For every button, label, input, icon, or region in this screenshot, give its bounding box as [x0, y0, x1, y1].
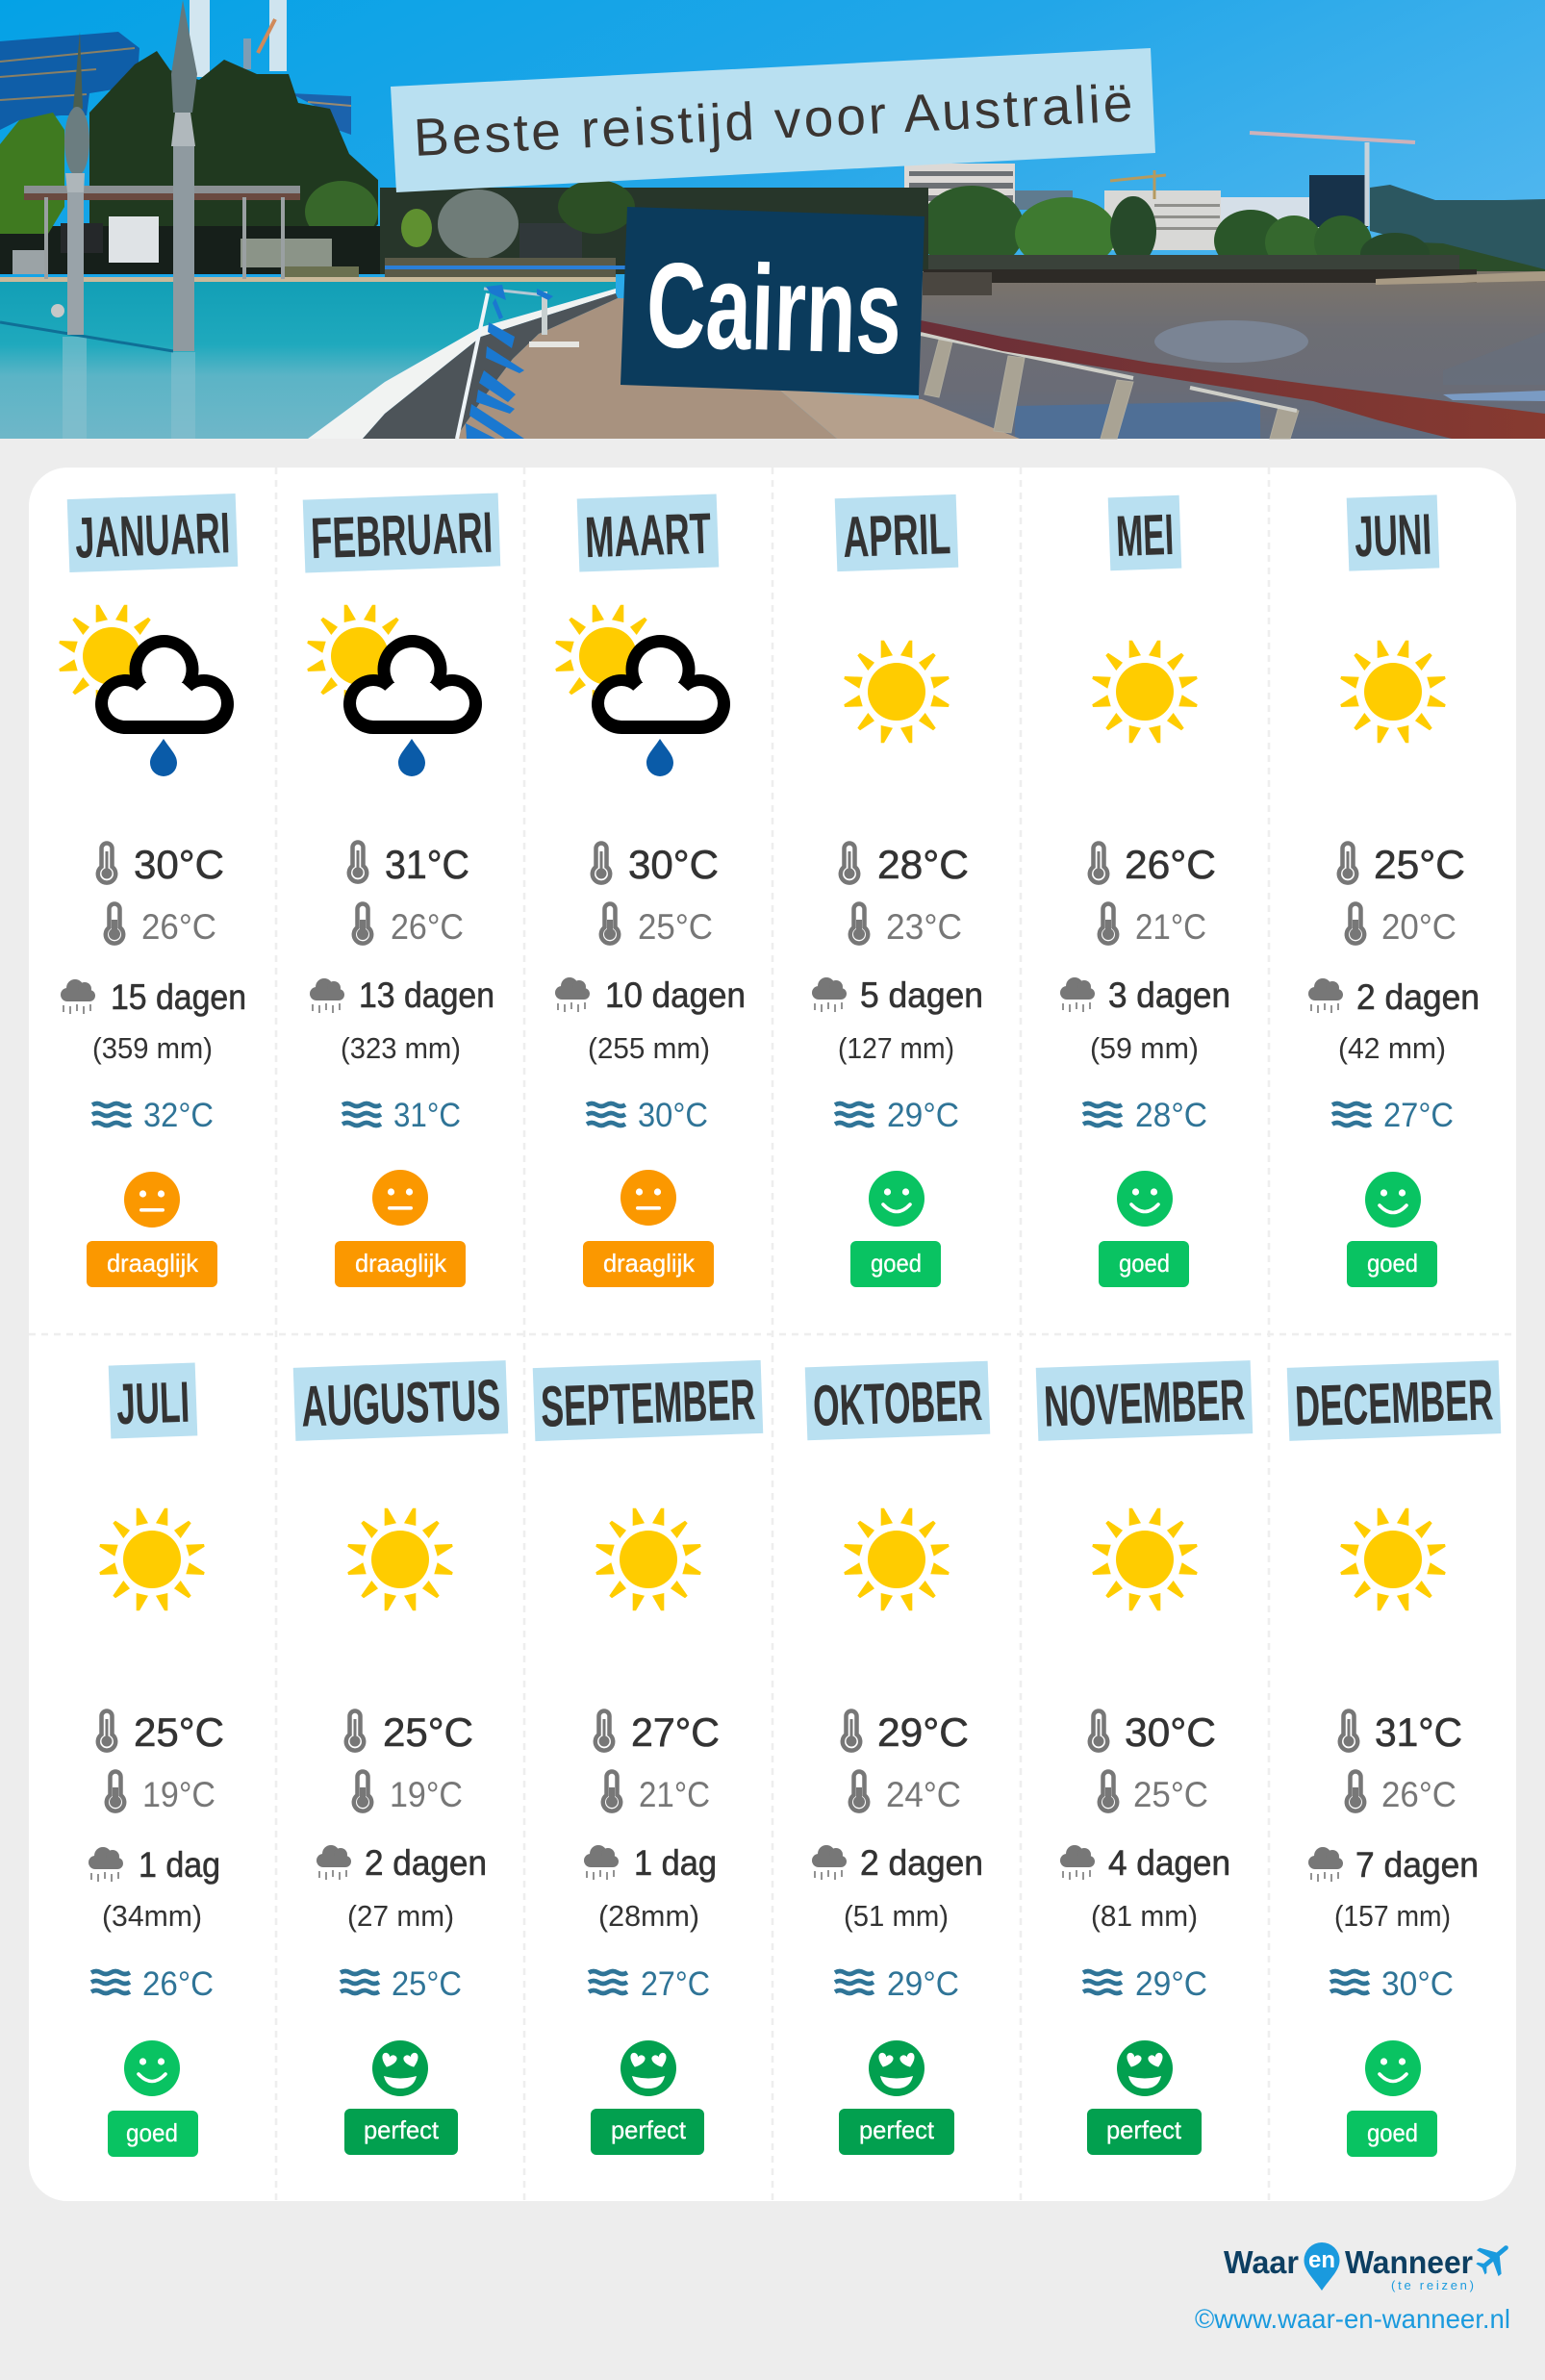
logo: Waar en Wanneer: [1224, 2233, 1519, 2292]
rating face: [372, 2040, 428, 2096]
water temperature: [341, 1965, 462, 2003]
rating badge: [108, 2111, 198, 2157]
water temperature: [91, 1965, 214, 2003]
logo: Waar en Wanneer: Waar: [1224, 2244, 1299, 2280]
rainfall: (51 mm): [844, 1899, 949, 1933]
title banner: [391, 48, 1155, 192]
month label: NOVEMBER: [1043, 1367, 1246, 1439]
water temperature: 28°C: [1135, 1097, 1207, 1134]
rating badge: [1099, 1241, 1189, 1287]
icon: sun: [99, 1508, 205, 1610]
rating badge: perfect: [1106, 2115, 1182, 2144]
rating face: [124, 2040, 180, 2096]
rain days: 3 dagen: [1108, 975, 1230, 1015]
rain days: 2 dagen: [365, 1843, 487, 1883]
month label: FEBRUARI: [310, 500, 494, 570]
month label: APRIL: [842, 501, 951, 570]
month label: SEPTEMBER: [540, 1367, 756, 1439]
rating face: [621, 2040, 676, 2096]
rating face: [1365, 1172, 1421, 1228]
max temperature: [1340, 1709, 1462, 1755]
water temperature: 27°C: [641, 1965, 710, 2003]
panel: december: [1287, 1360, 1501, 2157]
min temperature: [106, 904, 216, 947]
month label: [1108, 495, 1181, 570]
water temperature: 30°C: [1381, 1965, 1454, 2003]
month label: [67, 494, 238, 572]
water temperature: [342, 1097, 461, 1134]
website credit: ©www.waar-en-wanneer.nl: [1195, 2304, 1510, 2334]
water temperature: [1330, 1965, 1454, 2003]
month label: [835, 494, 958, 571]
icon: sun: [844, 641, 950, 743]
panel: januari: [59, 494, 246, 1287]
rating badge: goed: [871, 1249, 922, 1278]
min temperature: [107, 1772, 215, 1814]
max temperature: 25°C: [1374, 842, 1465, 887]
icon: sun: [1340, 641, 1446, 743]
rain days: [1308, 977, 1480, 1017]
max temperature: 30°C: [134, 842, 224, 887]
calendar card: [29, 468, 1516, 2201]
rainfall: (127 mm): [838, 1031, 954, 1065]
water temperature: [589, 1965, 710, 2003]
rainfall: (34mm): [102, 1899, 202, 1933]
water temperature: [587, 1097, 708, 1134]
rain days: [812, 1843, 983, 1883]
rain days: [1060, 975, 1230, 1015]
rainfall: (28mm): [598, 1899, 699, 1933]
rating badge: [583, 1241, 714, 1287]
rating badge: [87, 1241, 217, 1287]
max temperature: 27°C: [631, 1709, 720, 1755]
logo: Waar en Wanneer: Wanneer: [1345, 2244, 1473, 2280]
rain days: 2 dagen: [860, 1843, 983, 1883]
rain days: 5 dagen: [860, 975, 983, 1015]
rating badge: [1347, 2111, 1437, 2157]
title banner: Beste reistijd voor Australië: [413, 73, 1134, 167]
rating badge: perfect: [859, 2115, 935, 2144]
icon: sun and cloud with rain: [307, 605, 482, 776]
rainfall: (81 mm): [1091, 1899, 1198, 1933]
min temperature: 24°C: [886, 1775, 961, 1814]
rating face: [1365, 2040, 1421, 2096]
max temperature: [349, 842, 469, 887]
min temperature: 25°C: [1133, 1775, 1208, 1814]
min temperature: [601, 904, 713, 947]
min temperature: 25°C: [638, 907, 713, 947]
icon: sun: [1340, 1508, 1446, 1610]
rating badge: [1087, 2109, 1202, 2155]
rainfall: (323 mm): [341, 1031, 461, 1065]
water temperature: 26°C: [142, 1965, 214, 2003]
rating badge: goed: [126, 2118, 178, 2147]
panel: juli: [89, 1362, 224, 2157]
logo: Waar en Wanneer: en: [1308, 2247, 1335, 2273]
water temperature: 30°C: [638, 1097, 708, 1134]
panel: april: [812, 494, 983, 1287]
rain days: [89, 1845, 220, 1885]
month label: [1347, 494, 1439, 571]
rain days: 13 dagen: [359, 975, 494, 1015]
panel: augustus: [293, 1360, 508, 2155]
min temperature: 26°C: [141, 907, 216, 947]
icon: sun: [844, 1508, 950, 1610]
water temperature: [835, 1097, 959, 1134]
rating badge: perfect: [611, 2115, 687, 2144]
month label: [303, 493, 500, 573]
min temperature: 23°C: [886, 907, 962, 947]
water temperature: [92, 1097, 214, 1134]
min temperature: 21°C: [1135, 907, 1206, 947]
rating badge: draaglijk: [355, 1249, 447, 1278]
rating badge: [839, 2109, 954, 2155]
min temperature: [850, 1772, 961, 1814]
rainfall: (59 mm): [1090, 1031, 1199, 1065]
month label: [293, 1360, 508, 1441]
max temperature: 25°C: [383, 1709, 473, 1755]
min temperature: 26°C: [1381, 1775, 1456, 1814]
rain days: 4 dagen: [1108, 1843, 1230, 1883]
min temperature: [1100, 904, 1206, 947]
panel: mei: [1060, 495, 1230, 1287]
max temperature: 28°C: [877, 842, 969, 887]
min temperature: 26°C: [391, 907, 464, 947]
panel: juni: [1308, 494, 1480, 1287]
min temperature: [603, 1772, 710, 1814]
rating badge: [335, 1241, 466, 1287]
rainfall: (157 mm): [1334, 1899, 1451, 1933]
water temperature: 25°C: [392, 1965, 462, 2003]
water temperature: [835, 1965, 959, 2003]
rating face: [621, 1170, 676, 1226]
max temperature: 25°C: [134, 1709, 224, 1755]
icon: sun: [1092, 641, 1198, 743]
min temperature: [1100, 1772, 1208, 1814]
panel: oktober: [805, 1361, 990, 2155]
water temperature: 29°C: [1135, 1965, 1207, 2003]
min temperature: 21°C: [639, 1775, 710, 1814]
panel: september: [533, 1360, 763, 2155]
min temperature: [1347, 1772, 1456, 1814]
water temperature: 29°C: [887, 1965, 959, 2003]
rating face: [869, 2040, 924, 2096]
max temperature: 30°C: [628, 842, 719, 887]
month label: JULI: [115, 1370, 190, 1436]
water temperature: 31°C: [393, 1097, 461, 1134]
rain days: [310, 975, 494, 1015]
max temperature: 26°C: [1125, 842, 1216, 887]
rainfall: (42 mm): [1338, 1031, 1446, 1065]
month label: [533, 1360, 763, 1441]
month label: [577, 494, 719, 572]
logo: Waar en Wanneer: (te reizen): [1391, 2278, 1474, 2292]
min temperature: 19°C: [142, 1775, 215, 1814]
rating badge: draaglijk: [603, 1249, 696, 1278]
rain days: 1 dag: [634, 1843, 717, 1883]
month label: AUGUSTUS: [300, 1367, 501, 1439]
min temperature: 20°C: [1381, 907, 1456, 947]
rain days: 7 dagen: [1355, 1845, 1479, 1885]
min temperature: [354, 1772, 463, 1814]
min temperature: 19°C: [390, 1775, 463, 1814]
min temperature: [354, 904, 464, 947]
rating face: [869, 1171, 924, 1227]
rain days: [61, 977, 246, 1017]
rainfall: (27 mm): [347, 1899, 454, 1933]
max temperature: 30°C: [1125, 1709, 1216, 1755]
rating badge: goed: [1367, 2118, 1418, 2147]
rainfall: (359 mm): [92, 1031, 213, 1065]
rain days: [317, 1843, 487, 1883]
panel: februari: [303, 493, 500, 1287]
water temperature: 29°C: [887, 1097, 959, 1134]
panel: november: [1036, 1360, 1253, 2155]
rain days: [1060, 1843, 1230, 1883]
water temperature: 27°C: [1383, 1097, 1454, 1134]
icon: plane: [1470, 2233, 1519, 2282]
rain days: 10 dagen: [605, 975, 746, 1015]
rating face: [1117, 2040, 1173, 2096]
rain days: [584, 1843, 717, 1883]
icon: sun and cloud with rain: [59, 605, 234, 776]
rain days: [812, 975, 983, 1015]
month label: MAART: [584, 501, 712, 570]
panel: maart: [555, 494, 746, 1287]
month label: JUNI: [1354, 502, 1432, 569]
rating face: [372, 1170, 428, 1226]
header photo: Cairns esplanade: [0, 0, 1545, 439]
month label: [109, 1362, 197, 1439]
month label: MEI: [1115, 502, 1175, 569]
icon: map pin: [1304, 2242, 1339, 2291]
rainfall: (255 mm): [588, 1031, 710, 1065]
water temperature: [1083, 1097, 1207, 1134]
water temperature: [1083, 1965, 1207, 2003]
rain days: 2 dagen: [1356, 977, 1480, 1017]
city banner: Cairns: [621, 207, 924, 395]
rating badge: [344, 2109, 458, 2155]
rating face: [1117, 1171, 1173, 1227]
min temperature: [1347, 904, 1456, 947]
rating badge: goed: [1119, 1249, 1170, 1278]
icon: sun: [347, 1508, 453, 1610]
icon: sun: [595, 1508, 701, 1610]
rating badge: [1347, 1241, 1437, 1287]
min temperature: [850, 904, 962, 947]
max temperature: 31°C: [1375, 1709, 1462, 1755]
rating badge: draaglijk: [107, 1249, 199, 1278]
month label: [805, 1361, 990, 1440]
city banner: Cairns: Cairns: [645, 237, 903, 379]
water temperature: [1332, 1097, 1454, 1134]
rating badge: perfect: [364, 2115, 440, 2144]
rain days: 15 dagen: [111, 977, 246, 1017]
water temperature: 32°C: [143, 1097, 214, 1134]
rating badge: [591, 2109, 704, 2155]
rain days: 1 dag: [139, 1845, 220, 1885]
month label: [1036, 1360, 1253, 1441]
month label: OKTOBER: [812, 1368, 983, 1438]
month label: JANUARI: [74, 500, 231, 570]
rating face: [124, 1172, 180, 1228]
rating badge: goed: [1367, 1249, 1418, 1278]
rating badge: [850, 1241, 941, 1287]
icon: sun: [1092, 1508, 1198, 1610]
icon: sun and cloud with rain: [555, 605, 730, 776]
max temperature: 31°C: [385, 842, 469, 887]
max temperature: 29°C: [877, 1709, 969, 1755]
